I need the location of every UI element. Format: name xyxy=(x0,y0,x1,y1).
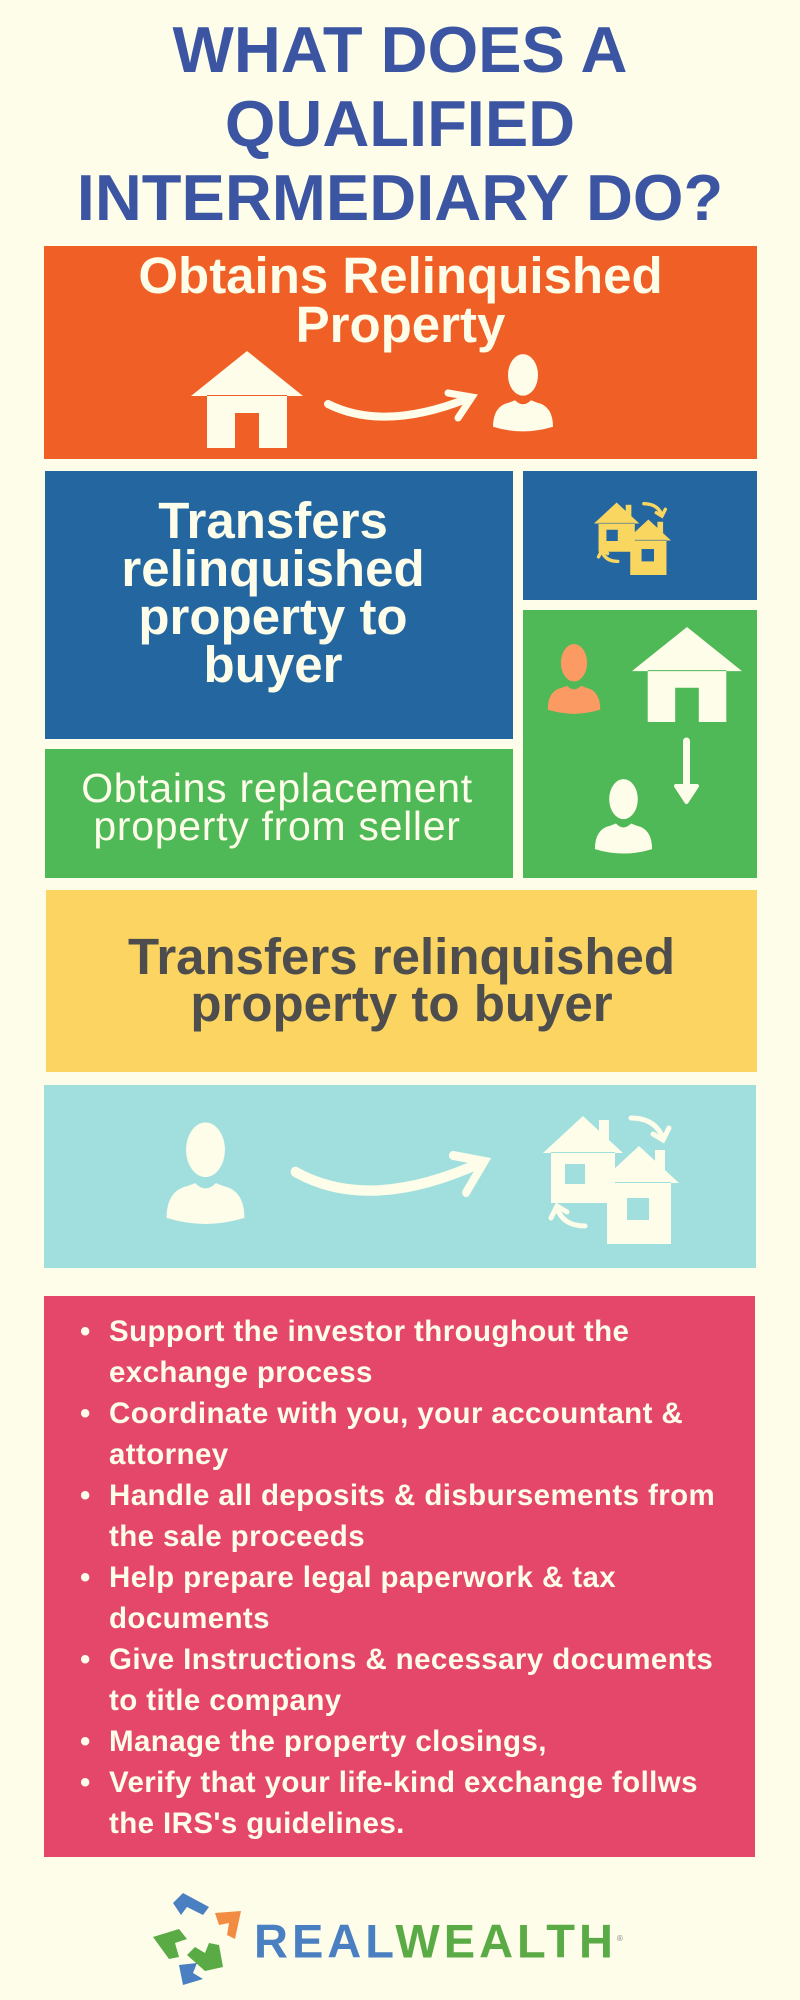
arrow: down xyxy=(674,738,700,804)
bullet list: Support the investor throughout the xyxy=(109,1315,629,1348)
bullet list: • xyxy=(80,1725,91,1758)
heading: transfers relinquished property to buyer: buyer xyxy=(204,636,342,693)
heading: obtains relinquished property: Obtains Relinquished xyxy=(138,247,663,304)
bullet list: Manage the property closings, xyxy=(109,1725,547,1758)
title xyxy=(77,13,723,234)
text: obtains replacement property from seller: Obtains replacement xyxy=(81,765,473,811)
heading: obtains relinquished property: Property xyxy=(296,296,505,353)
heading: yellow: Transfers relinquished xyxy=(128,928,675,985)
bullet list: • xyxy=(80,1643,91,1676)
bullet list: documents xyxy=(109,1602,270,1635)
logo: realwealth xyxy=(153,1893,627,1985)
bullet list: • xyxy=(80,1479,91,1512)
heading: yellow: property to buyer xyxy=(190,975,613,1032)
bullet list: • xyxy=(80,1766,91,1799)
icon: person orange panel xyxy=(493,354,553,432)
title: INTERMEDIARY DO? xyxy=(77,161,723,234)
heading: transfers relinquished property to buyer xyxy=(121,492,425,693)
title: WHAT DOES A xyxy=(173,13,627,86)
text: realwealth wordmark: REALWEALTH® xyxy=(254,1915,627,1968)
bullet list: Help prepare legal paperwork & tax xyxy=(109,1561,616,1594)
bullet list: Verify that your life-kind exchange follws xyxy=(109,1766,698,1799)
title: QUALIFIED xyxy=(225,87,575,160)
icon: orange person xyxy=(548,644,600,714)
arrow: orange panel xyxy=(324,390,478,422)
bullet list: • xyxy=(80,1315,91,1348)
heading: yellow xyxy=(128,928,675,1032)
bullet list: • xyxy=(80,1397,91,1430)
bullet list: attorney xyxy=(109,1438,229,1471)
panel: obtains relinquished property xyxy=(44,246,757,459)
bullet list: Give Instructions & necessary documents xyxy=(109,1643,713,1676)
panel: transfers relinquished property (blue) xyxy=(45,471,513,739)
bullet list: Handle all deposits & disbursements from xyxy=(109,1479,715,1512)
bullet list: to title company xyxy=(109,1684,342,1717)
bullet list xyxy=(80,1315,715,1840)
icon: yellow swap houses xyxy=(594,502,671,575)
icon: person cyan xyxy=(166,1122,244,1224)
panel: cyan person to houses xyxy=(44,1085,756,1268)
bullet list: • xyxy=(80,1561,91,1594)
heading: obtains relinquished property xyxy=(138,247,663,353)
bullet list: the IRS's guidelines. xyxy=(109,1807,405,1840)
panel: obtains replacement property (green) xyxy=(45,749,513,878)
text: obtains replacement property from seller xyxy=(81,765,473,849)
panel: responsibilities list xyxy=(44,1296,755,1857)
heading: transfers relinquished property to buyer: Transfers xyxy=(158,492,388,549)
icon: house orange panel xyxy=(191,351,303,448)
heading: transfers relinquished property to buyer: property to xyxy=(138,588,408,645)
bullet list: the sale proceeds xyxy=(109,1520,365,1553)
icon: pinwheel arrows xyxy=(153,1893,241,1985)
bullet list: Coordinate with you, your accountant & xyxy=(109,1397,683,1430)
arrow: cyan xyxy=(290,1151,491,1198)
text: obtains replacement property from seller: property from seller xyxy=(93,803,461,849)
heading: transfers relinquished property to buyer: relinquished xyxy=(121,540,425,597)
panel: small blue with houses icon xyxy=(523,471,757,600)
bullet list: exchange process xyxy=(109,1356,373,1389)
panel: yellow transfers relinquished property xyxy=(46,890,757,1072)
icon: white person green panel xyxy=(594,779,652,854)
icon: house green panel xyxy=(632,627,742,722)
panel: green right with transfer icons xyxy=(523,610,757,878)
icon: swap houses cyan xyxy=(543,1116,679,1244)
